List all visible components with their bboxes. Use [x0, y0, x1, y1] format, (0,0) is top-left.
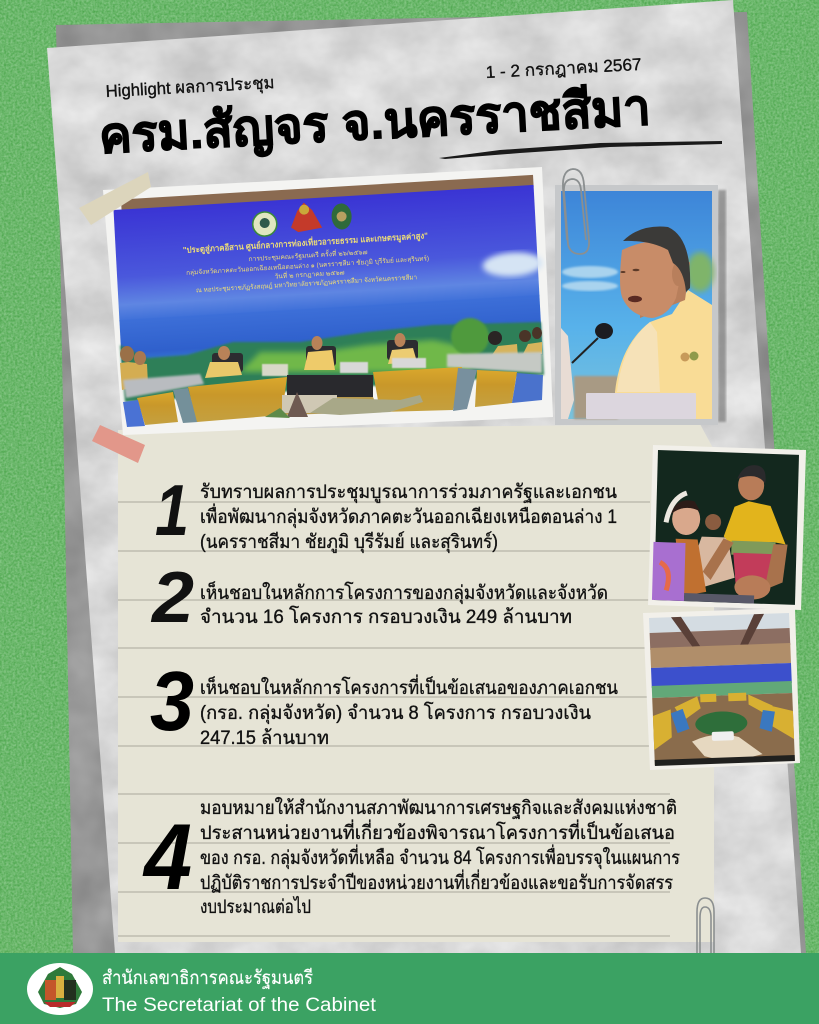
brush underline: [439, 141, 722, 159]
footer banner: [0, 953, 819, 1024]
photo: meeting hall: [643, 608, 800, 770]
shadow: [718, 190, 726, 422]
screens: [671, 709, 690, 733]
date: 1 - 2 กรกฎาคม 2567: [485, 55, 642, 82]
text 2: จำนวน 16 โครงการ กรอบวงเงิน 249 ล้านบาท: [200, 605, 572, 628]
photo: PM signing: [648, 445, 806, 610]
photo: prime minister speaking: [555, 185, 726, 425]
text 4: ประสานหน่วยงานที่เกี่ยวข้องพิจารณาโครงการที่เป็นข้อเสนอ: [200, 819, 675, 844]
yellow shirt man: [702, 463, 790, 601]
text 4: ของ กรอ. กลุ่มจังหวัดที่เหลือ จำนวน 84 โครงการเพื่อบรรจุในแผนการ: [200, 844, 680, 870]
text 3: (กรอ. กลุ่มจังหวัด) จำนวน 8 โครงการ กรอบวงเงิน: [200, 701, 591, 725]
cloud: [482, 251, 543, 278]
mouth: [628, 296, 642, 302]
text 3: [200, 674, 618, 749]
plant centrepiece: [695, 711, 748, 736]
laptop: [586, 393, 696, 419]
guest in background: [705, 514, 721, 530]
table items: [123, 374, 204, 398]
list item 2: [150, 558, 608, 638]
hair: [623, 227, 690, 292]
banner text: วันที่ ๒ กรกฎาคม ๒๕๖๗: [274, 267, 345, 281]
white torn frame: [103, 167, 553, 435]
ceiling: [649, 613, 790, 633]
blue stage banner: [651, 663, 792, 688]
number 2: 2: [150, 558, 194, 638]
text 4: งบประมาณต่อไป: [200, 896, 311, 918]
number 4: 4: [142, 804, 192, 909]
grey frame: [555, 185, 718, 425]
white frame: [648, 445, 806, 610]
gold tables: [652, 691, 794, 750]
text 1: รับทราบผลการประชุมบูรณาการร่วมภาครัฐและเอกชน: [200, 482, 617, 504]
banner text: การประชุมคณะรัฐมนตรี ครั้งที่ ๒๖/๒๕๖๗: [248, 247, 368, 263]
text 1: [200, 482, 617, 554]
dark background: [654, 450, 799, 605]
paperclip: top: [563, 169, 589, 254]
purple booklet: [652, 542, 686, 601]
neck and head: [640, 262, 690, 318]
list item 3: [150, 654, 618, 749]
number 1: 1: [155, 471, 189, 551]
agency name: English: The Secretariat of the Cabinet: [102, 995, 377, 1016]
text 3: 247.15 ล้านบาท: [200, 728, 329, 749]
paperclip: bottom: [697, 898, 714, 953]
forest hills: [120, 322, 544, 402]
floor: [652, 693, 795, 765]
text 4: [200, 797, 680, 918]
banner text: [183, 228, 430, 295]
table top: [684, 593, 754, 604]
seated ministers: [120, 327, 542, 390]
person at left edge: [561, 328, 574, 419]
text 3: เห็นชอบในหลักการโครงการที่เป็นข้อเสนอของภาคเอกชน: [200, 674, 618, 699]
number 3: 3: [150, 654, 194, 748]
text 4: ปฏิบัติราชการประจำปีของหน่วยงานที่เกี่ยวข้องและขอรับการจัดสรร: [200, 869, 673, 894]
text 1: เพื่อพัฒนากลุ่มจังหวัดภาคตะวันออกเฉียงเหนือตอนล่าง 1: [200, 503, 617, 529]
logo: cabinet emblem: [27, 963, 93, 1015]
jacket: [615, 290, 712, 419]
microphone: [572, 323, 613, 363]
agency name: Thai: สำนักเลขาธิการคณะรัฐมนตรี: [102, 967, 313, 989]
banner text: "ประตูสู่ภาคอีสาน ศูนย์กลางการท่องเที่ยวอารยธรรม และเกษตรมูลค่าสูง": [183, 228, 428, 256]
text 2: เห็นชอบในหลักการโครงการของกลุ่มจังหวัดและจังหวัด: [200, 580, 608, 605]
photo: cabinet meeting hall: [103, 167, 553, 435]
text 1: (นครราชสีมา ชัยภูมิ บุรีรัมย์ และสุรินทร์): [200, 531, 498, 554]
lapel pins: [680, 352, 690, 362]
title: ครม.สัญจร จ.นครราชสีมา: [98, 79, 652, 165]
floor edge: [655, 755, 795, 766]
text 2: [200, 580, 608, 628]
banner logos: [252, 200, 352, 237]
woman in traditional dress: [664, 492, 709, 597]
sky backdrop: [561, 191, 712, 419]
list item 1: [155, 471, 617, 554]
blue sky backdrop: [114, 185, 540, 322]
display centrepiece: [265, 392, 423, 418]
tape: beige: [79, 172, 151, 225]
blue haze: [119, 295, 543, 380]
projector on cloth: [692, 733, 763, 764]
list item 4: [142, 797, 680, 918]
banner text: ณ หอประชุมราชภัฏรังสฤษฎ์ มหาวิทยาลัยราชภัฏนครราชสีมา จังหวัดนครราชสีมา: [196, 273, 418, 294]
hall wall: [650, 643, 791, 668]
tree: [451, 318, 489, 356]
subheading: highlight: Highlight ผลการประชุม: [105, 73, 275, 102]
gold draped tables: [123, 367, 543, 427]
eyes: [620, 269, 640, 273]
backdrop clouds and trees: [562, 266, 618, 278]
wood wall strip: [121, 175, 534, 212]
tape: pink: [92, 425, 145, 463]
text 4: มอบหมายให้สำนักงานสภาพัฒนาการเศรษฐกิจและสังคมแห่งชาติ: [200, 797, 677, 819]
note paper panel: [118, 424, 714, 942]
banner text: กลุ่มจังหวัดภาคตะวันออกเฉียงเหนือตอนล่าง ๑ (นครราชสีมา ชัยภูมิ บุรีรัมย์ และสุรินทร์): [186, 254, 429, 277]
white frame: [643, 608, 800, 770]
